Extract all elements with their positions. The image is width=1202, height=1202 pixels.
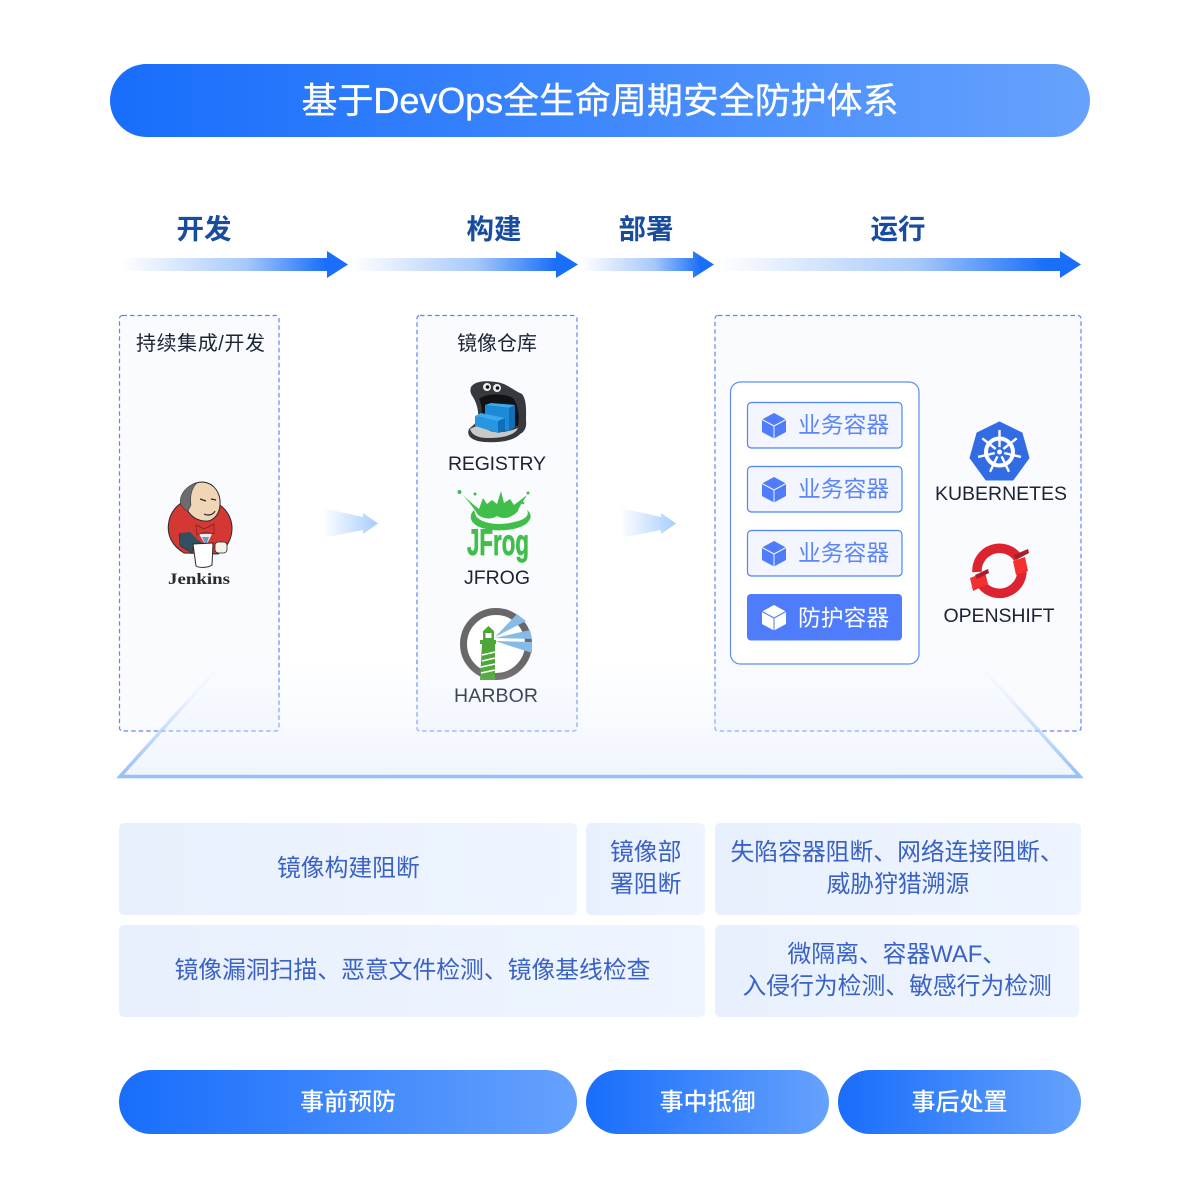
cell: 失陷容器阻断: 威胁狩猎溯源 — [826, 871, 969, 898]
business container 3 — [748, 530, 902, 576]
panel label: 镜像仓库 — [457, 332, 537, 355]
cell: 镜像漏洞扫描 — [119, 925, 705, 1017]
label: OPENSHIFT: OPENSHIFT — [944, 605, 1055, 627]
stage: 构建 — [350, 214, 578, 278]
panel: 镜像仓库 — [417, 316, 577, 731]
container group — [730, 382, 919, 664]
stage: 运行: 运行 — [870, 214, 926, 244]
business container 2 — [748, 466, 902, 512]
arrow: 开发 to 镜像仓库 — [322, 508, 378, 538]
business container 3: 业务容器 — [798, 540, 889, 566]
label: KUBERNETES: KUBERNETES — [935, 483, 1067, 505]
cell: 失陷容器阻断: 失陷容器阻断、网络连接阻断、 — [730, 839, 1064, 866]
stage: 构建: 构建 — [466, 214, 522, 244]
cell: 镜像部署阻断: 署阻断 — [610, 871, 681, 898]
title banner — [110, 64, 1090, 137]
panel: 运行 — [715, 316, 1081, 731]
cell: 失陷容器阻断 — [715, 823, 1081, 915]
stage: 开发 — [120, 214, 348, 278]
cell: 微隔离: 入侵行为检测、敏感行为检测 — [742, 973, 1052, 1000]
stage: 开发: 开发 — [176, 214, 232, 244]
panel label: 持续集成/开发 — [136, 332, 265, 355]
icon: OpenShift logo — [970, 548, 1029, 593]
cell: 微隔离: 微隔离、容器WAF、 — [788, 941, 1006, 968]
Jenkins wordmark: Jenkins — [168, 571, 230, 588]
pill: 事后处置 — [838, 1070, 1081, 1134]
business container 2: 业务容器 — [798, 476, 889, 502]
icon: Registry oyster — [468, 381, 526, 442]
cell: 镜像部署阻断 — [586, 823, 705, 915]
protection container: 防护容器 — [798, 605, 889, 631]
cell: 镜像构建阻断: 镜像构建阻断 — [277, 855, 420, 882]
protection container — [747, 594, 902, 640]
icon: JFrog logo — [458, 490, 531, 563]
stage: 部署: 部署 — [618, 214, 674, 244]
cell: 镜像漏洞扫描: 镜像漏洞扫描、恶意文件检测、镜像基线检查 — [174, 957, 650, 984]
title banner: 基于DevOps全生命周期安全防护体系 — [302, 80, 898, 121]
panel: 持续集成/开发 — [120, 316, 279, 731]
pill: 事后处置: 事后处置 — [912, 1089, 1008, 1116]
label: JFROG: JFROG — [464, 567, 530, 589]
JFrog wordmark: JFrog — [467, 522, 529, 563]
icon: Kubernetes logo — [970, 422, 1029, 480]
business container 1 — [748, 402, 902, 448]
pill: 事中抵御: 事中抵御 — [660, 1089, 756, 1116]
pill: 事中抵御 — [586, 1070, 829, 1134]
label: REGISTRY: REGISTRY — [448, 453, 546, 475]
icon: Harbor logo — [464, 612, 532, 680]
business container 1: 业务容器 — [798, 412, 889, 438]
pill: 事前预防: 事前预防 — [300, 1089, 396, 1116]
label: HARBOR: HARBOR — [454, 685, 538, 707]
arrow: 镜像仓库 to 运行 — [620, 508, 676, 538]
cell: 镜像构建阻断 — [119, 823, 577, 915]
platform trapezoid — [118, 663, 1082, 778]
cell: 微隔离 — [715, 925, 1079, 1017]
pill: 事前预防 — [119, 1070, 577, 1134]
stage: 部署 — [580, 214, 714, 278]
icon: Jenkins logo — [168, 482, 232, 588]
cell: 镜像部署阻断: 镜像部 — [610, 839, 681, 866]
stage: 运行 — [716, 214, 1081, 278]
